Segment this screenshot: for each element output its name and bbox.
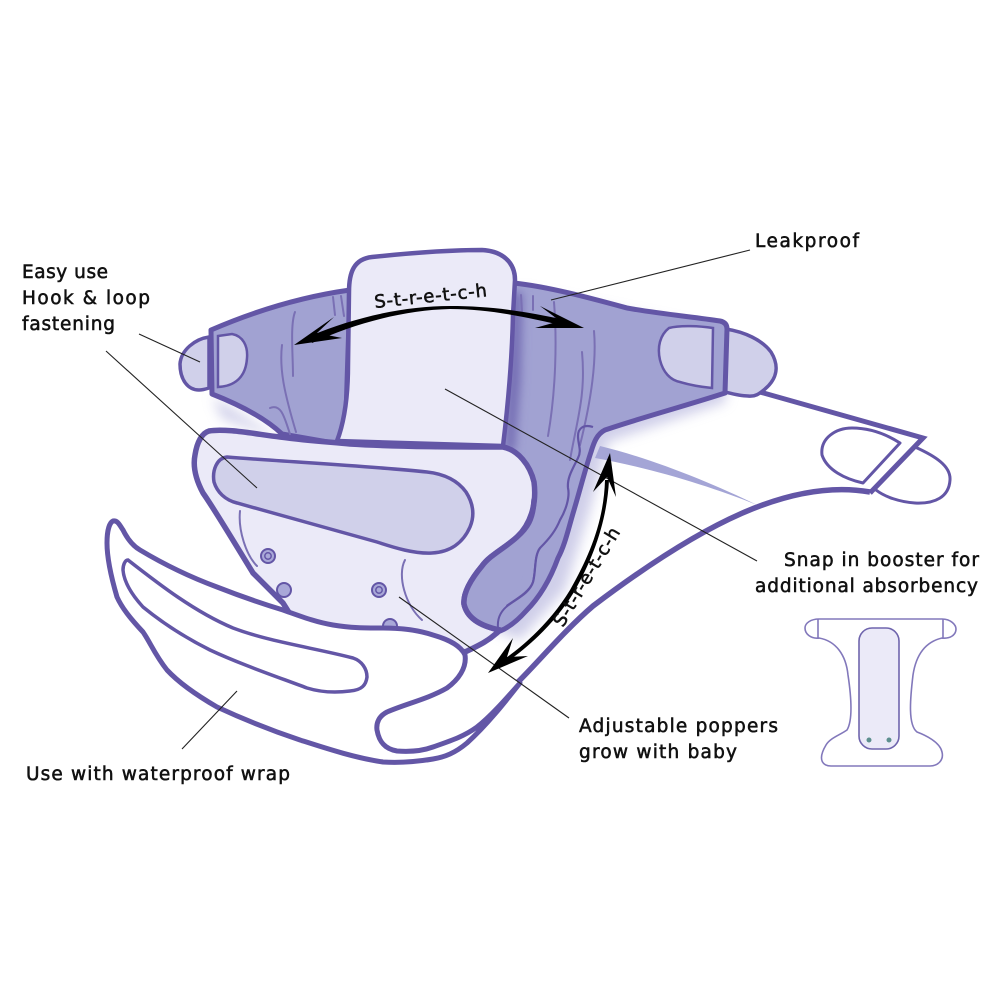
- booster pad: [337, 250, 515, 446]
- leader lines: [106, 250, 757, 749]
- dark inner fold: [464, 530, 530, 630]
- waterproof wrap: front: [107, 521, 520, 762]
- label: snap in booster: additional absorbency: [755, 576, 978, 597]
- waterproof wrap: rear flap: [518, 392, 950, 682]
- fastening strip: [214, 457, 473, 553]
- right wing folds: [521, 295, 595, 460]
- label: hook and loop: Easy use: [22, 262, 108, 283]
- stretch label: vertical: S-t-r-e-t-c-h: [549, 524, 625, 631]
- label: snap in booster: Snap in booster for: [784, 550, 979, 571]
- label: leakproof: Leakproof: [755, 231, 859, 252]
- poppers: [261, 549, 397, 633]
- left wing folds: [270, 296, 344, 434]
- front folds: [240, 511, 422, 620]
- wing crinkle edge: [498, 426, 593, 628]
- stretch arrow: vertical: [488, 453, 616, 673]
- label: hook and loop: fastening: [22, 314, 115, 335]
- small flat nappy diagram: [805, 619, 956, 766]
- stretch arrow: horizontal: [294, 306, 584, 345]
- panel: left wing of nappy: [180, 290, 350, 445]
- label: waterproof wrap: Use with waterproof wrap: [26, 764, 290, 785]
- fold crinkle: [498, 548, 540, 628]
- wrap fastening patch: [822, 428, 900, 483]
- wrap inner shading strip: [595, 446, 757, 505]
- wrap inner panel: [123, 560, 367, 692]
- panel: right wing of nappy: [470, 283, 776, 631]
- booster edge shading: [505, 292, 522, 452]
- right hook patch: [659, 326, 713, 388]
- left tab: [180, 337, 209, 390]
- wrap tab: [876, 447, 950, 503]
- label: hook and loop: Hook & loop: [22, 288, 150, 309]
- label: adjustable poppers: Adjustable poppers: [579, 716, 778, 737]
- right tab: [725, 329, 776, 396]
- label: adjustable poppers: grow with baby: [579, 742, 737, 763]
- nappy shadow: [212, 290, 726, 640]
- left hook patch: [218, 334, 247, 387]
- stretch label: horizontal: S-t-r-e-t-c-h: [373, 280, 488, 313]
- small booster: [859, 628, 899, 749]
- panel: front of nappy: [194, 430, 540, 652]
